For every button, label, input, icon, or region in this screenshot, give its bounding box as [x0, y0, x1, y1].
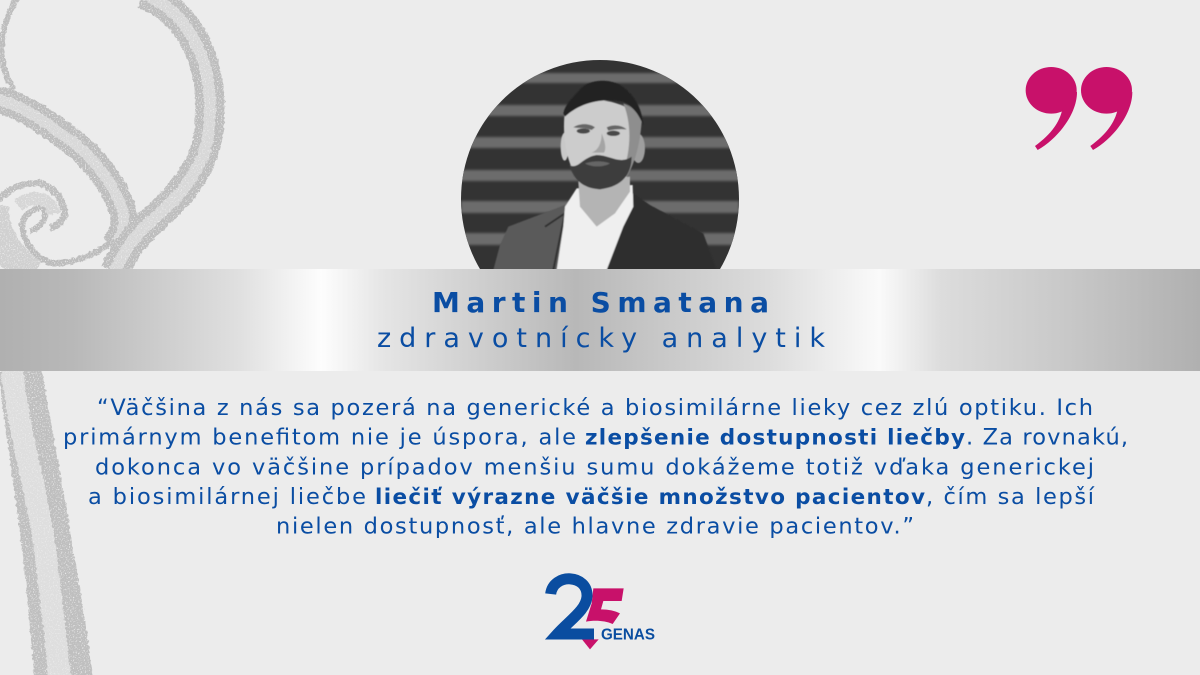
shirt — [557, 185, 633, 270]
silver banner — [0, 269, 1200, 371]
ornament: chalk stem bottom left — [0, 365, 93, 675]
beard — [569, 155, 632, 189]
quote line 4: a biosimilárnej liečbe — [88, 484, 366, 510]
eyes and brows — [573, 124, 595, 130]
jacket lapel line — [545, 213, 565, 270]
hair — [563, 81, 643, 125]
quote line 2: . Za rovnakú, — [966, 425, 1128, 451]
ornament: chalk swirl top left — [0, 0, 210, 274]
logo: GENAS 25 — [551, 579, 655, 649]
quote line 4 — [88, 484, 1095, 510]
logo two — [551, 579, 594, 634]
jacket right — [607, 193, 717, 270]
logo five — [582, 588, 624, 649]
ears — [561, 133, 569, 161]
neck — [578, 177, 630, 227]
face — [563, 100, 630, 178]
quote line 5: nielen dostupnosť, ale hlavne zdravie pacientov.” — [276, 514, 914, 540]
lips — [585, 161, 610, 166]
quote line 2: zlepšenie dostupnosti liečby — [585, 426, 965, 451]
quote line 4: liečiť výrazne väčšie množstvo pacientov — [375, 485, 925, 510]
logo wordmark: GENAS — [601, 626, 655, 644]
name: Martin Smatana — [432, 286, 769, 319]
quote line 3: dokonca vo väčšine prípadov menšiu sumu dokážeme totiž vďaka generickej — [95, 454, 1094, 480]
quote line 2: primárnym benefitom nie je úspora, ale — [63, 425, 576, 451]
role: zdravotnícky analytik — [377, 323, 825, 354]
shaded side of face — [622, 103, 642, 177]
portrait photo — [461, 60, 739, 270]
quote line 2 — [63, 425, 1128, 451]
nose shadow — [592, 133, 605, 153]
quote line 1: “Väčšina z nás sa pozerá na generické a biosimilárne lieky cez zlú optiku. Ich — [97, 395, 1093, 421]
icon: closing quotation mark — [1026, 67, 1132, 150]
jacket left — [493, 206, 565, 269]
quote line 4: , čím sa lepší — [926, 484, 1095, 510]
quote text — [63, 395, 1128, 540]
